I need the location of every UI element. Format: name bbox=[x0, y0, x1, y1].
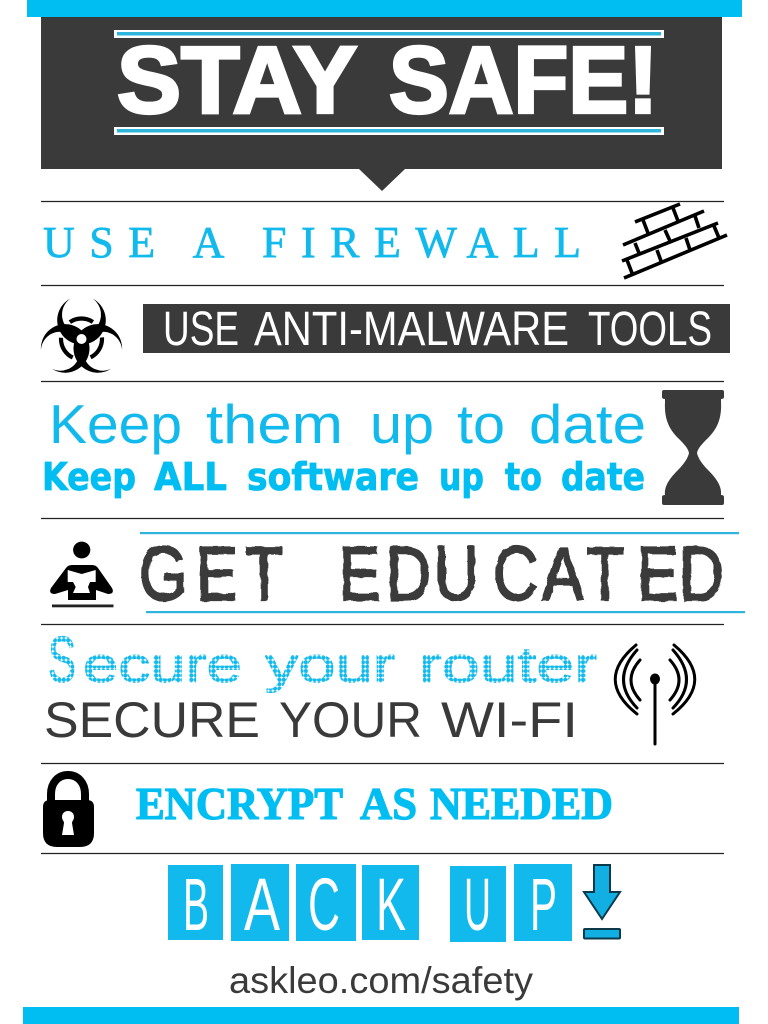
top accent bar bbox=[27, 0, 742, 17]
icon: biohazard bbox=[34, 298, 129, 380]
subheading: keep all software up to date: date bbox=[561, 455, 645, 499]
subheading: keep all software up to date: Keep bbox=[42, 455, 136, 499]
heading: back up tiles: K bbox=[376, 863, 406, 946]
banner lower rule bbox=[114, 127, 664, 135]
heading: use a firewall: USE A FIREWALL bbox=[43, 218, 581, 267]
heading: keep them up to date: Keep bbox=[49, 393, 182, 455]
rule below get educated bbox=[146, 611, 745, 613]
banner: use anti-malware tools bbox=[143, 303, 730, 356]
banner: use anti-malware tools: USE bbox=[163, 303, 239, 356]
heading: encrypt as needed: AS bbox=[360, 778, 417, 829]
heading: back up tiles bbox=[168, 863, 572, 946]
heading: encrypt as needed bbox=[136, 778, 613, 829]
subheading: keep all software up to date: software bbox=[247, 455, 419, 499]
subheading: secure your wi-fi bbox=[44, 692, 578, 748]
title: STAY bbox=[117, 28, 357, 134]
icon: padlock bbox=[43, 775, 94, 847]
icon: wireless antenna bbox=[615, 645, 695, 744]
heading: back up tiles: C bbox=[308, 863, 340, 946]
heading: back up tiles: P bbox=[530, 863, 557, 946]
heading: encrypt as needed: ENCRYPT bbox=[136, 778, 343, 829]
bottom accent bar bbox=[23, 1007, 739, 1024]
subheading: keep all software up to date: ALL bbox=[154, 455, 227, 499]
subheading: secure your wi-fi: WI-FI bbox=[441, 692, 578, 748]
heading: back up tiles: B bbox=[183, 863, 209, 946]
icon: brick wall bbox=[622, 204, 727, 278]
icon: hourglass bbox=[662, 390, 724, 505]
subheading: keep all software up to date: up bbox=[439, 455, 484, 499]
subheading: secure your wi-fi: SECURE bbox=[44, 692, 260, 748]
banner: use anti-malware tools: TOOLS bbox=[588, 303, 712, 356]
heading: back up tiles: A bbox=[244, 863, 280, 946]
heading: secure your router bbox=[48, 623, 597, 696]
heading: keep them up to date: up bbox=[370, 393, 434, 455]
heading: encrypt as needed: NEEDED bbox=[430, 778, 613, 829]
heading: keep them up to date bbox=[49, 393, 646, 455]
title bbox=[117, 28, 658, 134]
banner background with pointer bbox=[41, 17, 722, 191]
heading: secure your router: your bbox=[265, 637, 395, 693]
icon: person reading bbox=[50, 542, 114, 607]
heading: secure your router: router bbox=[419, 637, 597, 693]
heading: keep them up to date: date bbox=[529, 393, 646, 455]
banner upper rule bbox=[114, 30, 664, 38]
heading: get educated: GET EDUCATED bbox=[139, 531, 724, 616]
subheading: keep all software up to date bbox=[42, 455, 645, 499]
footer link: askleo.com/safety bbox=[229, 960, 533, 1001]
heading: keep them up to date: them bbox=[206, 393, 343, 455]
icon: download arrow bbox=[584, 865, 620, 938]
subheading: secure your wi-fi: YOUR bbox=[279, 692, 422, 748]
banner: use anti-malware tools: ANTI-MALWARE bbox=[254, 303, 569, 356]
title: SAFE! bbox=[389, 28, 658, 134]
rule above get educated bbox=[140, 532, 739, 534]
subheading: keep all software up to date: to bbox=[505, 455, 542, 499]
title banner bbox=[41, 17, 722, 191]
heading: secure your router: S bbox=[48, 623, 76, 696]
heading: keep them up to date: to bbox=[457, 393, 505, 455]
heading: back up tiles: U bbox=[464, 863, 491, 946]
heading: secure your router: ecure bbox=[83, 637, 242, 693]
